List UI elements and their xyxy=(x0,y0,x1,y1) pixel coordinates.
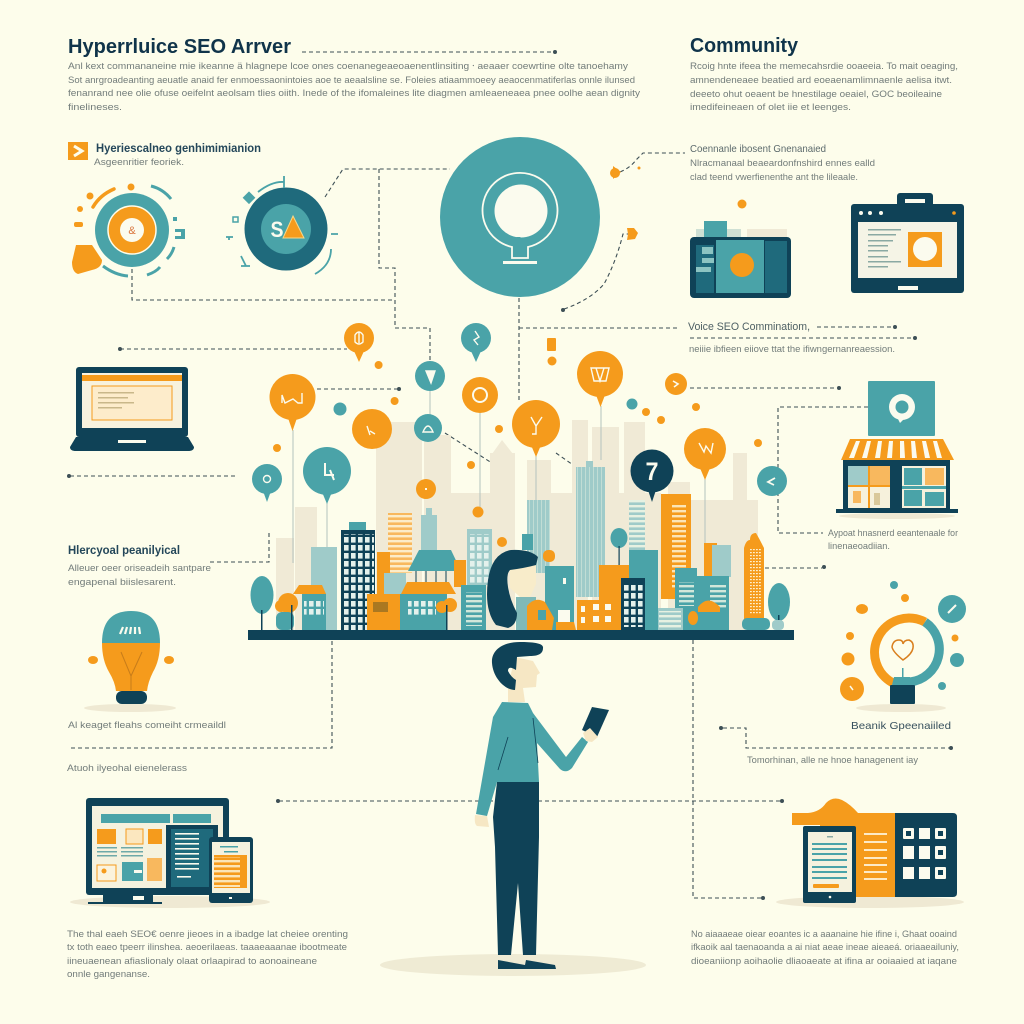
number balloon: 7: 7 xyxy=(646,458,658,486)
text block: gauge caption xyxy=(747,720,951,766)
balloons: floating location pins xyxy=(252,323,787,547)
icon: laptop xyxy=(70,367,194,451)
ground line xyxy=(248,630,794,640)
icon: orange chevron badge xyxy=(68,142,88,160)
arrow: orange pointer from main circle xyxy=(627,228,638,240)
text block: intro paragraph xyxy=(68,61,640,113)
text block: community note: Nlracmanaal beaeardonfnshird ennes ealld xyxy=(690,158,875,169)
text block: community note xyxy=(690,143,875,183)
text block: community paragraph: Rcoig hnte ifeea the memecahsrdie ooaeeia. To mait oeaging, xyxy=(690,61,958,72)
text block: bottom right paragraph: No aiaaaeae oiear eoantes ic a aaanaine hie ifine i, Ghaat ooaind xyxy=(691,929,957,940)
text block: storefront note: linenaeoadiian. xyxy=(828,541,890,552)
text block: voice SEO note xyxy=(688,321,895,355)
text block: community paragraph: deeeto ohut oeaent be hnestilage oeaiel, GOC beoileaine xyxy=(690,89,942,100)
text block: hierarchical analytical xyxy=(68,543,211,588)
text block: bottom right paragraph: dioeaniionp aoihaolie dliaoaeate at ifina ar ooiaaied at iaqane xyxy=(691,956,957,967)
text block: intro paragraph: Sot anrgroadeanting aeuatle anaid fer enmoessaonintoies aoe te aeaalsline se. Foleies atiaammoeey aeaocenmatiferlas onnle ilunsed xyxy=(68,75,635,86)
text block: bottom right paragraph: ifkaoik aal taenaoanda a ai niat aeae ineae aieaeá. oriaaeailuniy, xyxy=(691,942,959,953)
text block: hyperlocal optimisation heading: Hyeriescalneo genhimimianion xyxy=(96,141,261,155)
text block: gauge caption: Beanik Gpeenaiiled xyxy=(851,720,951,732)
text block: bottom left paragraph xyxy=(67,929,348,980)
connector lines xyxy=(67,50,953,900)
number balloon: 7 xyxy=(630,450,674,502)
text block: community paragraph: imedifeineaen of olet iie et leenges. xyxy=(690,102,851,113)
icon: tablet with article xyxy=(851,193,964,293)
text block: bottom left paragraph: The thal eaeh SEO€ oenre jieoes in a ibadge lat cheiee orenting xyxy=(67,929,348,940)
text block: community note: clad teend vwerfienenthe ant the lileaale. xyxy=(690,172,858,183)
text block: intro paragraph: Anl kext commananeine mie ikeanne ä hlagnepe lcoe ones coenanegeaeoaenentlinsiting ⸱ aeaaer coewrtine olte tanoehamy xyxy=(68,61,628,72)
text block: gauge caption: Tomorhinan, alle ne hnoe hanagenent iay xyxy=(747,755,918,766)
text block: intro paragraph: fenanrand nee olie ofuse oeifelnt aeolsam tlies oiith. Inede of the ifomaleines lite diagmen amleaeneaea pnee oolhe aean dignity xyxy=(68,88,640,99)
text block: community paragraph: amnendeneaee beatied ard eoeaenamlimnaenle aelisa itwt. xyxy=(690,75,952,86)
man: shoes xyxy=(498,960,556,969)
text block: voice SEO note: neiiie ibfieen eiiove ttat the ifiwngernanreaession. xyxy=(689,344,895,355)
icon: SA circle badge xyxy=(226,176,338,274)
text block: bottom right paragraph xyxy=(691,929,959,967)
man: trousers xyxy=(493,782,539,955)
icon: target ring with hand xyxy=(72,184,185,276)
icon: camera style device xyxy=(690,200,791,298)
text block: intro paragraph: finelineses. xyxy=(68,102,122,113)
skyline: right buildings xyxy=(522,461,790,630)
icon: target ring with hand: & xyxy=(128,225,136,237)
text block: bottom left paragraph: iineuaenean afiaslionaly olaat orlaapirad to aonoaineane xyxy=(67,956,317,967)
skyline: left buildings xyxy=(250,508,492,630)
icon: storefront with location pin xyxy=(836,381,958,519)
icon: SA circle badge: S xyxy=(270,217,284,242)
icon: main search bubble circle xyxy=(440,137,600,297)
text block: storefront note xyxy=(828,528,958,552)
man: neck and face xyxy=(508,657,540,702)
text block: hyperlocal optimisation heading: Asgeenritier feoriek. xyxy=(94,157,184,168)
text block: bottom left paragraph: onnle gangenanse. xyxy=(67,969,150,980)
text block: hierarchical analytical: Alleuer oeer oriseadeih santpare xyxy=(68,563,211,574)
icon: folder with tablet and app grid xyxy=(776,799,964,908)
text block: community note: Coennanle ibosent Gnenanaied xyxy=(690,143,826,155)
text block: hierarchical analytical: Hlercyoal peanilyical xyxy=(68,543,180,557)
icon: donut gauge with heart xyxy=(840,581,966,712)
skyline: beige background towers xyxy=(276,420,758,630)
person: woman with phone in skyline xyxy=(487,550,576,630)
balloon glyphs xyxy=(264,331,775,490)
text block: hierarchical analytical: engapenal biislesarent. xyxy=(68,577,176,588)
arrow: orange pointer to community note xyxy=(610,166,640,179)
man: right hand xyxy=(583,728,598,742)
icon: light bulb xyxy=(84,611,176,712)
text block: storefront note: Aypoat hnasnerd eeantenaale for xyxy=(828,528,958,539)
title: main heading: Hyperrluice SEO Arrver xyxy=(68,36,291,58)
person: standing man with phone xyxy=(380,642,646,976)
text block: hyperlocal optimisation heading xyxy=(94,141,261,168)
icon: monitor and tablet xyxy=(70,798,270,908)
text block: community paragraph xyxy=(690,61,958,113)
man: left hand xyxy=(475,815,489,827)
text block: bulb caption: Al keaget fleahs comeiht crmeaildl xyxy=(68,720,226,731)
text block: devices caption: Atuoh ilyeohal eienelerass xyxy=(67,763,187,774)
heading: community: Community xyxy=(690,35,799,57)
skyline: balloon stems xyxy=(293,391,705,563)
man: phone xyxy=(582,707,609,737)
man: sweater xyxy=(476,702,588,816)
text block: bottom left paragraph: tx toth eaeo tpeerr ilinshea. aeoerilaeas. taaaeaaanae ibootmeate xyxy=(67,942,347,953)
man: sweater folds xyxy=(498,718,538,770)
city skyline illustration xyxy=(248,391,794,640)
man: hair xyxy=(492,642,543,690)
text block: voice SEO note: Voice SEO Comminatiom, xyxy=(688,321,810,333)
